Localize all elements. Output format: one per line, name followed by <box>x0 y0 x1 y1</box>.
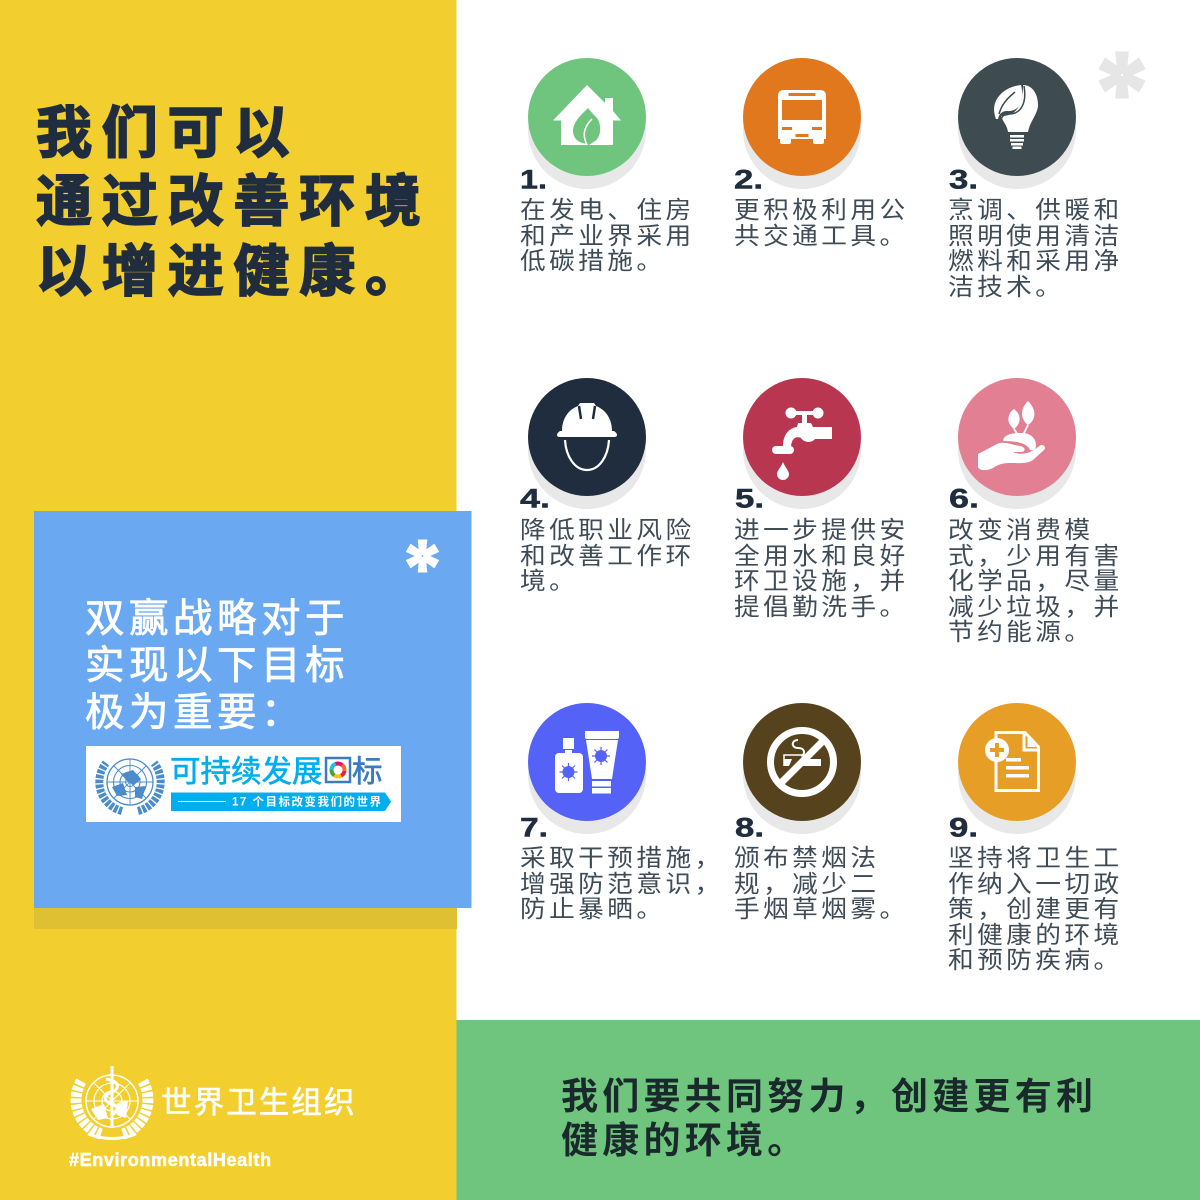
icon: no smoking <box>743 703 861 834</box>
number 3: 3. <box>949 164 978 194</box>
text 4: 降低职业风险 <box>520 517 695 544</box>
panel: green call to action <box>456 1020 1200 1200</box>
SDG logo card <box>86 746 401 822</box>
text 6: 改变消费模 <box>948 517 1093 544</box>
text 5: 提倡勤洗手。 <box>734 594 909 621</box>
text 5: 环卫设施，并 <box>734 568 909 595</box>
title: 我们可以 <box>36 102 299 164</box>
number 5: 5. <box>735 484 764 514</box>
icon: hard hat <box>528 378 646 509</box>
text 2: 更积极利用公 <box>734 197 909 224</box>
icon: house with leaf <box>528 58 646 189</box>
text 5 <box>734 517 909 621</box>
title: 以增进健康。 <box>36 240 431 303</box>
call to action text: 健康的环境。 <box>561 1120 808 1161</box>
blue box heading: 实现以下目标 <box>85 644 349 688</box>
text 4: 和改善工作环 <box>520 543 695 570</box>
text 4: 境。 <box>520 568 578 595</box>
item 7: sun protection <box>520 703 724 923</box>
text 8: 手烟草烟雾。 <box>734 896 909 923</box>
icon: faucet and drop <box>743 378 861 509</box>
text 7 <box>520 845 724 923</box>
text 9: 策，创建更有 <box>948 896 1123 923</box>
text 2: 共交通工具。 <box>734 223 909 250</box>
text 7: 增强防范意识， <box>520 871 724 898</box>
item 4: occupational safety <box>520 378 695 595</box>
number 4: 4. <box>520 484 550 514</box>
text 3 <box>948 197 1123 301</box>
SDG banner arrow: 17 个目标改变我们的世界 <box>232 794 382 808</box>
number 8: 8. <box>735 812 764 842</box>
SDG wordmark: 可持续发展 <box>170 755 322 789</box>
item 2: public transport <box>734 58 909 250</box>
text 1: 在发电、住房 <box>520 197 695 224</box>
text 9 <box>948 845 1123 974</box>
number 7: 7. <box>520 812 548 842</box>
text 6: 节约能源。 <box>948 619 1093 646</box>
title <box>36 102 431 303</box>
number 6: 6. <box>949 484 979 514</box>
blue box heading: 双赢战略对于 <box>85 597 349 641</box>
text 8: 规，减少二 <box>734 871 879 898</box>
icon: medical document <box>958 703 1076 834</box>
text 7: 防止暴晒。 <box>520 896 665 923</box>
WHO emblem <box>76 1066 148 1138</box>
blue box heading <box>85 597 349 735</box>
text 5: 全用水和良好 <box>734 543 909 570</box>
number 2: 2. <box>734 164 763 194</box>
item 3: clean fuels <box>948 58 1123 301</box>
UN emblem <box>99 759 161 811</box>
hashtag: #EnvironmentalHealth <box>69 1150 271 1170</box>
icon: hand with seedling <box>958 378 1076 509</box>
text 9: 作纳入一切政 <box>948 871 1123 898</box>
title: 通过改善环境 <box>36 170 431 233</box>
text 6: 式，少用有害 <box>948 543 1123 570</box>
item 8: tobacco control <box>734 703 909 923</box>
text 1: 和产业界采用 <box>520 223 695 250</box>
text 6 <box>948 517 1123 646</box>
SDG logo card: 标 <box>352 755 382 789</box>
call to action text <box>561 1076 1097 1161</box>
text 1: 低碳措施。 <box>520 248 665 275</box>
WHO wordmark: 世界卫生组织 <box>161 1086 357 1120</box>
blue box heading: 极为重要： <box>85 691 305 735</box>
item 6: consumption change <box>948 378 1123 646</box>
item 1: low carbon housing <box>520 58 695 275</box>
text 9: 利健康的环境 <box>948 922 1123 949</box>
text 3: 烹调、供暖和 <box>948 197 1123 224</box>
text 8 <box>734 845 909 923</box>
text 6: 减少垃圾，并 <box>948 594 1123 621</box>
SDG banner arrow <box>171 792 391 811</box>
SDG colour wheel <box>326 758 350 782</box>
icon: grey asterisk <box>1098 52 1146 98</box>
text 5: 进一步提供安 <box>734 517 909 544</box>
WHO logo <box>69 1066 357 1170</box>
number 1: 1. <box>520 164 547 194</box>
text 8: 颁布禁烟法 <box>734 845 879 872</box>
text 3: 燃料和采用净 <box>948 248 1123 275</box>
text 9: 和预防疾病。 <box>948 947 1123 974</box>
item 9: health in all policies <box>948 703 1123 974</box>
text 7: 采取干预措施， <box>520 845 724 872</box>
icon: leaf bulb <box>958 58 1076 189</box>
panel: blue goal box <box>34 511 472 929</box>
text 3: 照明使用清洁 <box>948 223 1123 250</box>
icon: bus <box>743 58 861 189</box>
text 3: 洁技术。 <box>948 274 1064 301</box>
icon: sunscreen <box>528 703 646 834</box>
panel: yellow left column <box>0 0 456 1200</box>
text 1 <box>520 197 695 275</box>
text 4 <box>520 517 695 595</box>
call to action text: 我们要共同努力，创建更有利 <box>561 1076 1097 1117</box>
text 6: 化学品，尽量 <box>948 568 1123 595</box>
item 5: water and sanitation <box>734 378 909 621</box>
icon: white asterisk <box>406 540 439 572</box>
text 2 <box>734 197 909 250</box>
text 9: 坚持将卫生工 <box>948 845 1123 872</box>
number 9: 9. <box>949 812 978 842</box>
